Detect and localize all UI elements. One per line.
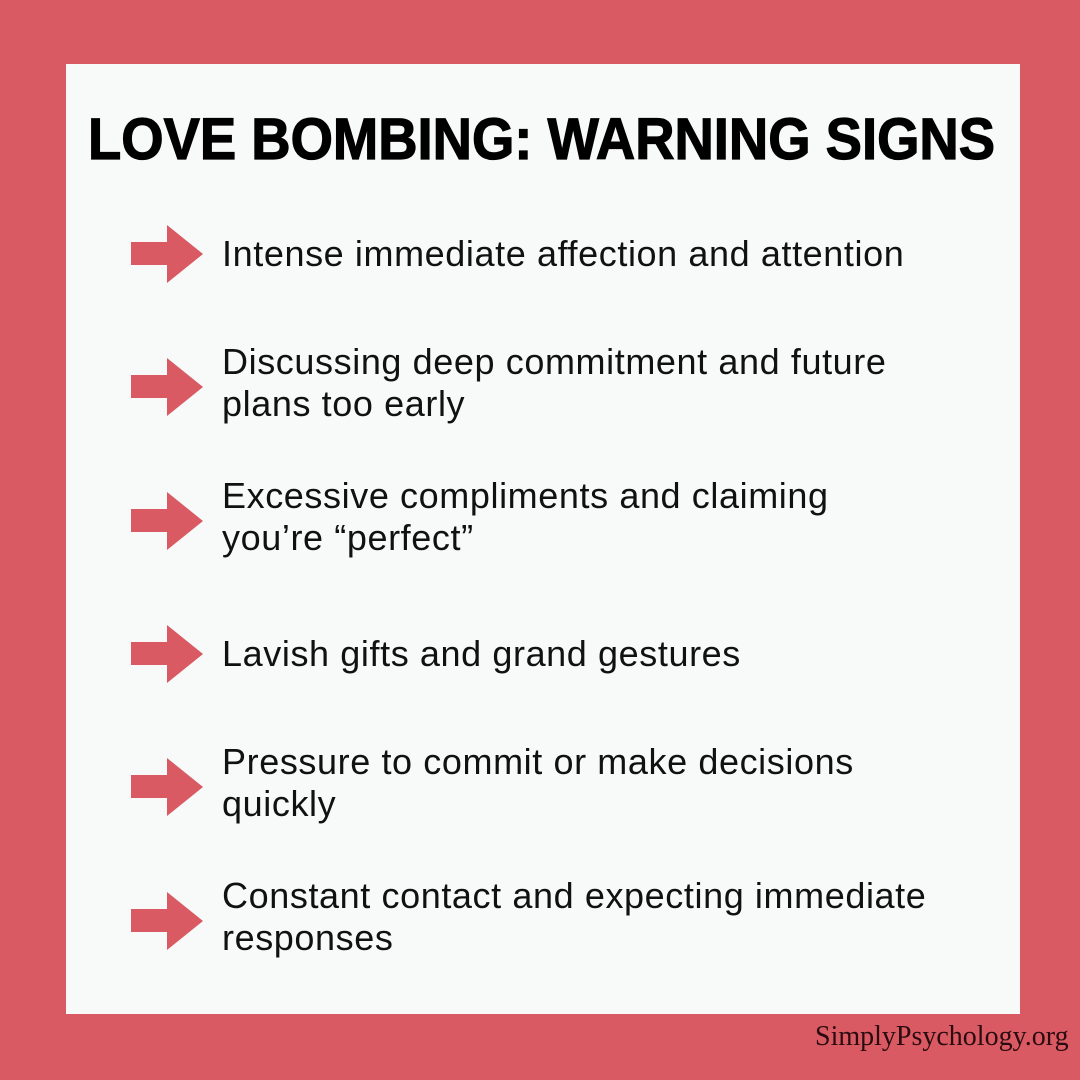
text: item 3: you’re “perfect”	[222, 517, 474, 558]
icon: arrow	[131, 892, 203, 950]
item 2	[131, 341, 887, 424]
icon: arrow	[131, 225, 203, 283]
item 3	[131, 475, 829, 558]
icon: arrow	[131, 625, 203, 683]
icon: arrow	[131, 492, 203, 550]
panel: main white card	[66, 64, 1020, 1014]
text: item 2	[222, 341, 887, 424]
credit: SimplyPsychology.org	[815, 1021, 1069, 1052]
text: item 5	[222, 741, 854, 824]
text: item 4: Lavish gifts and grand gestures	[222, 633, 741, 674]
text: item 2: Discussing deep commitment and future	[222, 341, 887, 382]
icon: arrow	[131, 358, 203, 416]
text: item 3: Excessive compliments and claiming	[222, 475, 829, 516]
text: item 1: Intense immediate affection and attention	[222, 233, 904, 274]
text: item 6	[222, 875, 926, 958]
text: item 6: responses	[222, 917, 394, 958]
item 1	[131, 225, 904, 283]
item 6	[131, 875, 926, 958]
text: item 5: quickly	[222, 783, 336, 824]
text: item 3	[222, 475, 829, 558]
item 5	[131, 741, 854, 824]
text: item 5: Pressure to commit or make decisions	[222, 741, 854, 782]
item 4	[131, 625, 741, 683]
text: item 6: Constant contact and expecting immediate	[222, 875, 926, 916]
icon: arrow	[131, 758, 203, 816]
text: item 2: plans too early	[222, 383, 465, 424]
